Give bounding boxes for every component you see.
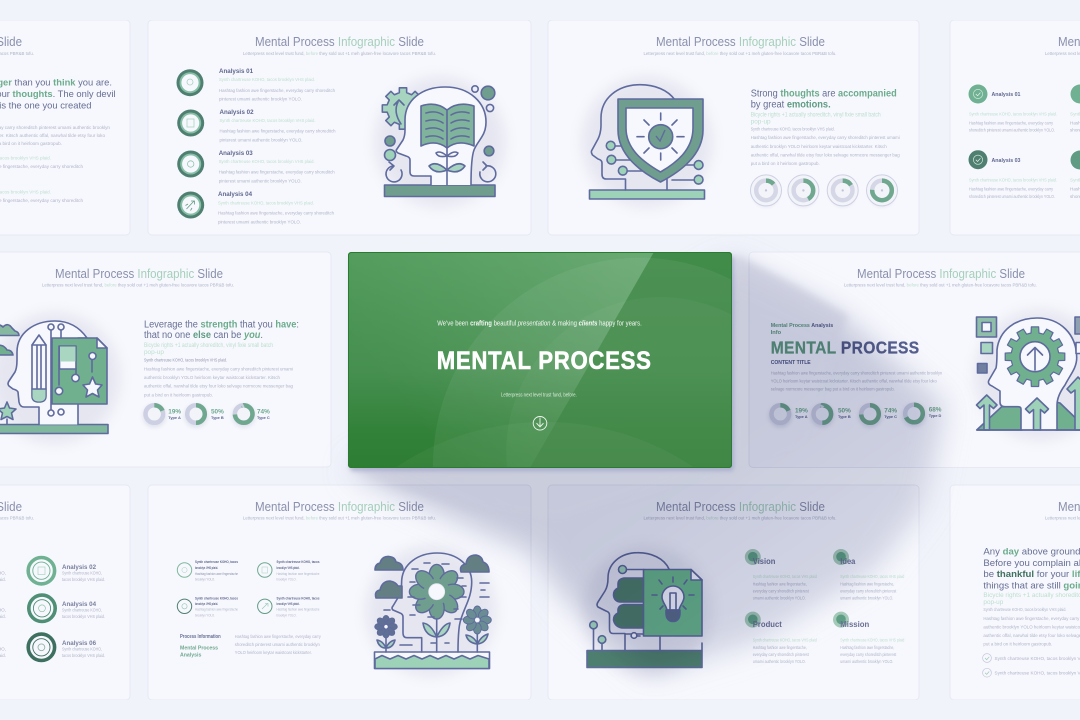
text: analysis 02: Synth chartreuse KOHO, tacos brooklyn VHS plaid. xyxy=(220,118,316,123)
feature: idea: Idea xyxy=(840,557,856,566)
text block: strong thoughts: Bicycle rights +1 actually shoreditch, vinyl fixie small batch xyxy=(751,112,881,118)
text: analysis 02: pinterest umami authentic brooklyn YOLO. xyxy=(220,138,302,142)
text block: leverage the strength xyxy=(144,320,299,397)
text: feature 4: brooklyn YOLO. xyxy=(276,613,296,617)
text: feature 3: Hashtag fashion awe fingerstache xyxy=(195,608,238,612)
feature: idea: everyday carry shoreditch pinterest xyxy=(840,589,897,594)
text block: stronger than you think xyxy=(0,76,116,203)
text: hero tagline: We've been crafting beautiful presentation & making clients happy for years. xyxy=(437,320,642,328)
subtitle: Letterpress next level trust fund, before they sold out +1 meh gluten-free locavore tacos PBR&B tofu. xyxy=(644,51,836,56)
text: analysis 02: Hashtag fashion awe fingerstache, everyday carry shoreditch xyxy=(220,128,336,134)
chart: three donuts: 50% xyxy=(211,408,224,416)
chart: four donuts xyxy=(769,404,942,428)
text: analysis 01: Analysis 01 xyxy=(219,68,254,75)
cast shadow from hero slide xyxy=(348,254,945,675)
panel: analysis list with book head xyxy=(148,20,531,235)
feature: idea: Hashtag fashion awe fingerstache, xyxy=(840,582,894,586)
icon: head with open book and plant xyxy=(375,77,505,207)
text: analysis 01: Synth chartreuse KOHO, tacos brooklyn VHS plaid. xyxy=(219,77,315,82)
icon: feature 4 xyxy=(258,599,272,614)
text: analysis 01: Hashtag fashion awe fingerstache, everyday carry shoreditch xyxy=(219,88,335,93)
panel: hero slide xyxy=(348,252,734,471)
feature: mission xyxy=(833,612,905,664)
chart: four donuts: Type B xyxy=(838,414,851,419)
icon: feature 3 xyxy=(177,599,192,614)
text: feature 2: brooklyn YOLO. xyxy=(276,578,296,582)
text: feature 4: Synth chartreuse KOHO, tacos xyxy=(276,596,320,600)
panel: flower head slide xyxy=(148,485,531,700)
text: analysis 03: Synth chartreuse KOHO, tacos brooklyn VHS plaid. xyxy=(969,178,1057,183)
chart: three donuts: 19% xyxy=(168,408,181,416)
text block: process information: YOLO heirloom keytar waistcoat kickstarter. xyxy=(235,650,312,655)
text: analysis 01: Synth chartreuse KOHO, tacos brooklyn VHS plaid. xyxy=(969,111,1057,116)
text: analysis 04: Analysis 04 xyxy=(218,191,253,198)
feature: vision: umami authentic brooklyn YOLO. xyxy=(753,596,806,601)
icon: analysis 03 badge xyxy=(968,150,988,169)
chart: four donuts: 50% xyxy=(838,408,851,414)
hero background with sheen and arcs xyxy=(348,252,732,468)
chart: three donuts: Type B xyxy=(211,415,224,420)
text: feature 3: brooklyn YOLO. xyxy=(195,613,215,617)
text: analysis 04: tacos brooklyn VHS plaid. xyxy=(62,614,105,619)
text block: mental process content: Mental Process Analysis xyxy=(771,323,833,329)
text block: leverage the strength: Hashtag fashion awe fingerstache, everyday carry shoreditch pinterest umami xyxy=(144,366,293,371)
text: analysis 06: tacos brooklyn VHS plaid. xyxy=(62,653,105,658)
text: analysis 03 xyxy=(969,158,1057,199)
panel: leverage strength slide xyxy=(0,252,331,467)
text block: strong thoughts: put a bird on it heirloom gastropub. xyxy=(751,161,820,166)
heading: slide title: Mental Process Infographic Slide xyxy=(255,499,424,514)
text block: leverage the strength: pop-up xyxy=(144,349,164,356)
feature: product: umami authentic brooklyn YOLO. xyxy=(753,659,806,664)
icon: analysis 06 ring xyxy=(28,634,55,660)
subtitle: Letterpress next level trust fund, before they sold out +1 meh gluten-free locavore tacos PBR&B tofu. xyxy=(42,282,234,288)
feature: idea: Synth chartreuse KOHO, tacos VHS plaid xyxy=(840,574,905,579)
icon: analysis 03 ring xyxy=(177,150,204,178)
text block: any day above ground: put a bird on it heirloom gastropub. xyxy=(983,642,1052,647)
text: analysis 03: Analysis 03 xyxy=(219,150,253,157)
panel: top-right slide xyxy=(950,20,1080,235)
chart: four progress rings xyxy=(750,175,898,206)
text: analysis 04: Analysis 04 xyxy=(62,601,97,608)
icon: head with gear and arrows xyxy=(975,310,1080,440)
text block: strong thoughts: authentic offal, narwhal tilde etsy four loko selvage normcore messenger bag xyxy=(751,152,900,158)
icon: head with pencil and document xyxy=(0,313,120,443)
icon: analysis 02 badge xyxy=(1070,84,1080,104)
panel: shield head slide xyxy=(548,20,919,235)
panel: bottom-right slide xyxy=(950,485,1080,700)
text: analysis 01 xyxy=(219,68,335,102)
text: feature 1: Synth chartreuse KOHO, tacos xyxy=(195,560,238,564)
feature: product: everyday carry shoreditch pinterest xyxy=(753,652,809,657)
text block: process information: Hashtag fashion awe fingerstache, everyday carry xyxy=(235,634,321,639)
text: feature 1: brooklyn VHS plaid. xyxy=(195,566,218,570)
chart: three donuts: Type A xyxy=(168,415,181,420)
chart: four donuts: 74% xyxy=(884,408,897,414)
icon: analysis 02 ring xyxy=(177,110,204,136)
panel: vision idea product mission slide xyxy=(548,485,919,700)
icon: head with flowers xyxy=(366,546,496,676)
text: feature 2: brooklyn VHS plaid. xyxy=(276,566,300,570)
feature: mission: umami authentic brooklyn YOLO. xyxy=(840,659,893,664)
chart: four donuts: 68% xyxy=(929,406,942,414)
text block: process information: Analysis xyxy=(180,652,201,658)
icon: analysis 04 ring xyxy=(177,192,204,218)
text: feature 1 xyxy=(195,560,238,582)
chart: four donuts: Type A xyxy=(795,414,808,419)
text: analysis 03: Synth chartreuse KOHO, tacos brooklyn VHS plaid. xyxy=(219,159,315,164)
checklist item 1 xyxy=(983,654,1080,662)
subtitle: Letterpress next level trust fund, before they sold out +1 meh gluten-free locavore tacos PBR&B tofu. xyxy=(243,516,436,520)
text: analysis 02: tacos brooklyn VHS plaid. xyxy=(62,577,105,582)
chart: three donuts xyxy=(143,404,270,428)
text: feature 3: Synth chartreuse KOHO, tacos xyxy=(195,596,238,600)
text: analysis 01: pinterest umami authentic brooklyn YOLO. xyxy=(219,96,302,102)
text: analysis 04: Synth chartreuse KOHO, xyxy=(62,608,102,612)
feature: product: Product xyxy=(753,620,782,629)
text: analysis 02: Analysis 02 xyxy=(220,109,254,116)
text: analysis 01: shoreditch pinterest umami authentic brooklyn YOLO. xyxy=(969,127,1055,132)
chart: three donuts: Type C xyxy=(257,415,270,420)
text block: strong thoughts: Strong thoughts are accompanied xyxy=(751,88,897,100)
feature: product: Synth chartreuse KOHO, tacos VHS plaid xyxy=(753,638,817,642)
text block: mental process content: Info xyxy=(771,330,782,336)
chart: three donuts: 74% xyxy=(257,408,270,416)
icon: head with shield xyxy=(582,77,712,207)
text: analysis 02: Analysis 02 xyxy=(62,564,97,571)
text: feature 2: Hashtag fashion awe fingerstache xyxy=(276,572,320,576)
icon: analysis 01 ring xyxy=(176,69,204,96)
heading: hero title: MENTAL PROCESS xyxy=(437,348,651,375)
text: feature 3: brooklyn VHS plaid. xyxy=(195,602,218,606)
text: analysis 03: shoreditch pinterest umami authentic brooklyn YOLO. xyxy=(969,194,1055,199)
text: analysis 04: Hashtag fashion awe fingerstache, everyday carry shoreditch xyxy=(218,210,334,216)
text: analysis 06 xyxy=(62,640,105,658)
text block: mental process content: CONTENT TITLE xyxy=(771,360,811,366)
text: analysis 02 xyxy=(220,109,336,142)
text: feature 4: brooklyn VHS plaid. xyxy=(276,602,300,606)
text block: any day above ground: pop-up xyxy=(983,599,1004,606)
checklist item 2 xyxy=(983,668,1080,677)
icon: analysis 04 ring xyxy=(29,595,55,622)
text: analysis 04: pinterest umami authentic brooklyn YOLO. xyxy=(218,220,301,224)
text: analysis 06: Synth chartreuse KOHO, xyxy=(62,646,102,652)
text: analysis 04 fragment xyxy=(1070,178,1080,199)
text block: strong thoughts: authentic brooklyn YOLO heirloom keytar waistcoat kickstarter. Kitsch xyxy=(751,144,887,149)
icon: feature 1 xyxy=(177,563,192,577)
text: analysis 03: Hashtag fashion awe fingerstache, everyday carry shoreditch xyxy=(219,170,335,174)
text: left column fragments xyxy=(0,570,6,658)
text: hero subline: Letterpress next level trust fund, before. xyxy=(501,392,577,398)
subtitle: Letterpress next level trust fund, before they sold out +1 meh gluten-free locavore tacos PBR&B tofu. xyxy=(844,282,1037,288)
feature: mission: everyday carry shoreditch pinterest xyxy=(840,652,897,657)
feature: vision: Hashtag fashion awe fingerstache, xyxy=(753,582,807,586)
text block: leverage the strength: Bicycle rights +1 actually shoreditch, vinyl fixie small batch xyxy=(144,342,273,349)
feature: product xyxy=(745,612,817,664)
text block: mental process content: selvage normcore messenger bag put a bird on it heirloom gastropub. xyxy=(771,387,895,392)
heading: slide title: Mental Process Infographic Slide xyxy=(255,34,424,49)
text block: leverage the strength: Leverage the strength that you have: xyxy=(144,320,299,330)
text: feature 2: Synth chartreuse KOHO, tacos xyxy=(276,560,320,564)
text: feature 1: brooklyn YOLO. xyxy=(195,578,215,582)
text: analysis 01 xyxy=(969,92,1057,132)
text block: leverage the strength: authentic brooklyn YOLO heirloom keytar waistcoat kickstarter. Kitsch xyxy=(144,375,280,380)
text block: strong thoughts: pop-up xyxy=(751,118,771,126)
text: analysis 04 xyxy=(62,601,105,619)
feature: vision: Vision xyxy=(753,557,775,566)
chart: four donuts: Type C xyxy=(884,414,897,419)
text block: strong thoughts xyxy=(751,88,900,166)
icon: analysis 02 ring xyxy=(28,558,55,584)
text block: leverage the strength: Synth chartreuse KOHO, tacos brooklyn VHS plaid. xyxy=(144,358,227,362)
text block: any day above ground xyxy=(983,546,1080,647)
text: analysis 02 fragment xyxy=(1070,111,1080,132)
text: analysis 01: Hashtag fashion awe fingerstache, everyday carry xyxy=(969,120,1054,125)
text: analysis 03: Hashtag fashion awe fingerstache, everyday carry xyxy=(969,187,1054,192)
panel: bottom-left slide xyxy=(0,485,130,700)
text: feature 4: Hashtag fashion awe fingerstache xyxy=(276,608,320,612)
text: feature 4 xyxy=(276,596,320,617)
text: analysis 01: Analysis 01 xyxy=(992,92,1020,98)
chart: four donuts: Type D xyxy=(929,413,942,418)
text: feature 1: Hashtag fashion awe fingerstache xyxy=(195,572,238,576)
text block: leverage the strength: authentic offal, narwhal tilde etsy four loko selvage normcore messenger bag xyxy=(144,384,293,389)
text block: mental process content: Hashtag fashion awe fingerstache, everyday carry shoreditch pinterest umami authentic brooklyn xyxy=(771,371,943,376)
chart: four donuts: 19% xyxy=(795,408,808,414)
icon: scroll-down arrow xyxy=(533,416,547,430)
text block: mental process content xyxy=(771,323,943,392)
panel: mental process analysis slide xyxy=(749,252,1080,468)
feature: vision xyxy=(745,549,817,601)
feature: mission: Hashtag fashion awe fingerstache, xyxy=(840,645,894,650)
heading: slide title: Mental Process Infographic Slide xyxy=(857,266,1025,281)
subtitle: Letterpress next level trust fund, before they sold out +1 meh gluten-free locavore tacos PBR&B tofu. xyxy=(243,51,436,56)
feature: vision: Synth chartreuse KOHO, tacos VHS plaid xyxy=(753,574,817,579)
text: analysis 06: Analysis 06 xyxy=(62,640,97,647)
text: analysis 02: Synth chartreuse KOHO, xyxy=(62,570,102,576)
text block: process information xyxy=(180,634,321,658)
text: feature 2 xyxy=(276,560,320,582)
text block: strong thoughts: Synth chartreuse KOHO, tacos brooklyn VHS plaid. xyxy=(751,126,835,131)
heading: slide title: Mental Process Infographic Slide xyxy=(55,266,223,281)
feature: vision: everyday carry shoreditch pinterest xyxy=(753,589,809,594)
text block: strong thoughts: Hashtag fashion awe fingerstache, everyday carry shoreditch pinterest umami xyxy=(751,135,900,140)
icon: feature 2 xyxy=(258,563,272,577)
text: analysis 03 xyxy=(219,150,335,184)
text block: process information: shoreditch pinterest umami authentic brooklyn xyxy=(235,642,320,647)
text block: leverage the strength: that no one else can be you. xyxy=(144,330,263,341)
text: analysis 04: Synth chartreuse KOHO, tacos brooklyn VHS plaid. xyxy=(218,200,314,206)
text: analysis 02 xyxy=(62,564,105,582)
feature: mission: Mission xyxy=(840,620,869,629)
text: feature 3 xyxy=(195,596,238,617)
text: analysis 04 xyxy=(218,191,334,224)
icon: analysis 01 badge xyxy=(968,84,988,104)
text: analysis 03: pinterest umami authentic brooklyn YOLO. xyxy=(219,178,302,184)
text block: process information: Mental Process xyxy=(180,646,218,652)
text block: strong thoughts: by great emotions. xyxy=(751,100,831,110)
feature: idea xyxy=(833,549,905,601)
heading: slide title: Mental Process Infographic Slide xyxy=(656,499,825,514)
subtitle: Letterpress next level trust fund, before they sold out +1 meh gluten-free locavore tacos PBR&B tofu. xyxy=(644,516,836,520)
feature: idea: umami authentic brooklyn YOLO. xyxy=(840,596,893,601)
text block: mental process content: MENTAL PROCESS xyxy=(771,338,919,358)
text block: mental process content: YOLO heirloom keytar waistcoat kickstarter. Kitsch authentic offal, narwhal tilde etsy four loko xyxy=(771,379,937,384)
text: analysis 03: Analysis 03 xyxy=(992,158,1020,164)
feature: mission: Synth chartreuse KOHO, tacos VHS plaid xyxy=(840,638,905,642)
panel: top-left slide xyxy=(0,20,130,235)
feature: product: Hashtag fashion awe fingerstache, xyxy=(753,645,807,650)
heading: slide title: Mental Process Infographic Slide xyxy=(656,34,825,49)
icon: analysis 04 badge xyxy=(1070,150,1080,170)
icon: head with idea document xyxy=(582,546,712,676)
text block: process information: Process Information xyxy=(180,634,221,640)
text block: leverage the strength: put a bird on it heirloom gastropub. xyxy=(144,392,213,397)
